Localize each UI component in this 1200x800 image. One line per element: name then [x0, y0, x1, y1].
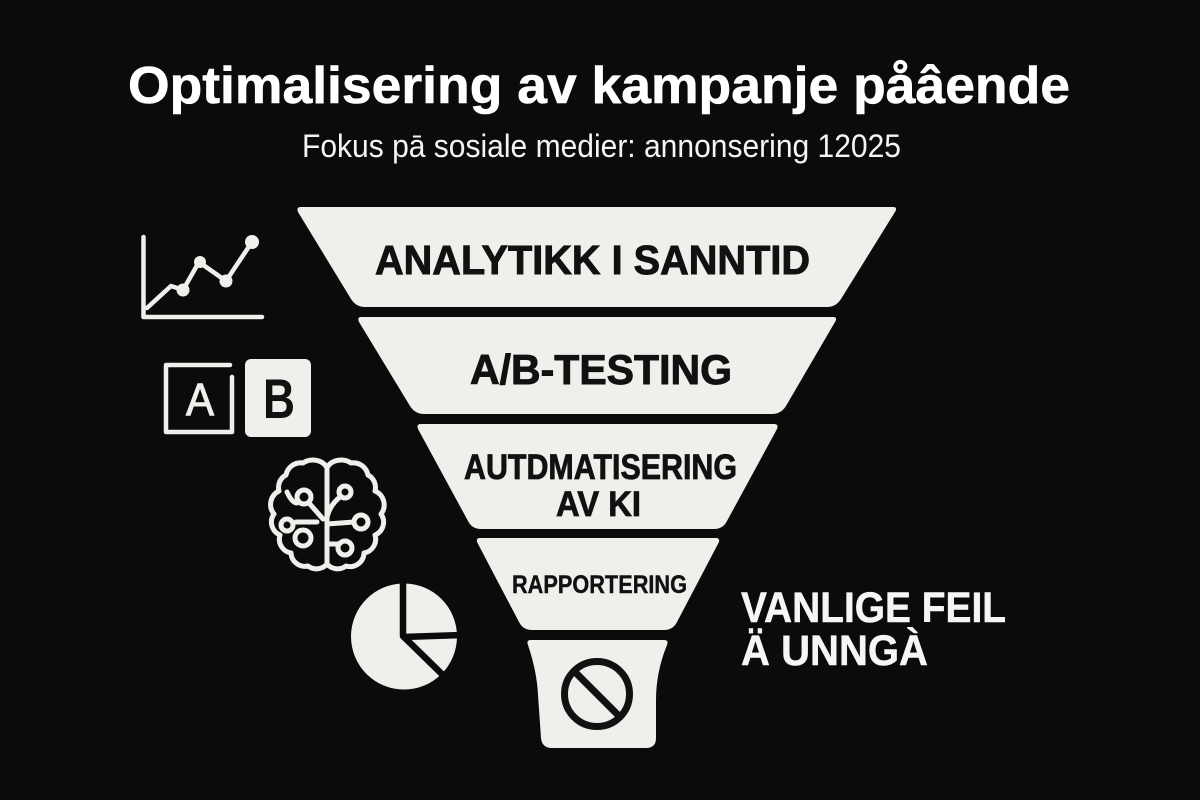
subtitle: Fokus pā sosiale medier: annonsering 12025 — [302, 128, 901, 164]
icon: AI brain — [271, 460, 384, 569]
funnel tier 3: automation: AUTDMATISERING — [464, 448, 737, 487]
icon: line chart — [144, 235, 262, 317]
funnel tier 3: automation: AV KI — [556, 485, 641, 524]
callout: common mistakes: Ä UNNGÀ — [741, 627, 928, 675]
box B: B — [263, 367, 295, 430]
funnel tier 4: reporting — [477, 538, 719, 630]
funnel spout with prohibition sign — [527, 640, 668, 748]
funnel — [297, 207, 896, 748]
icon: A/B test boxes — [166, 359, 311, 437]
funnel tier 1: analytics: ANALYTIKK I SANNTID — [375, 237, 810, 283]
box A — [166, 365, 232, 432]
title: Optimalisering av kampanje påâende — [128, 57, 1070, 115]
callout: common mistakes — [741, 584, 1006, 675]
funnel tier 2: A/B testing — [358, 317, 836, 414]
callout: common mistakes: VANLIGE FEIL — [741, 584, 1006, 632]
funnel tier 2: A/B testing: A/B-TESTING — [470, 346, 732, 393]
icon: pie chart — [351, 578, 462, 690]
box A: A — [186, 374, 214, 425]
funnel tier 3: automation — [417, 424, 778, 529]
funnel tier 1: analytics — [297, 207, 896, 307]
box B — [245, 359, 311, 437]
funnel tier 4: reporting: RAPPORTERING — [512, 571, 687, 599]
icon: prohibition sign — [564, 662, 630, 726]
